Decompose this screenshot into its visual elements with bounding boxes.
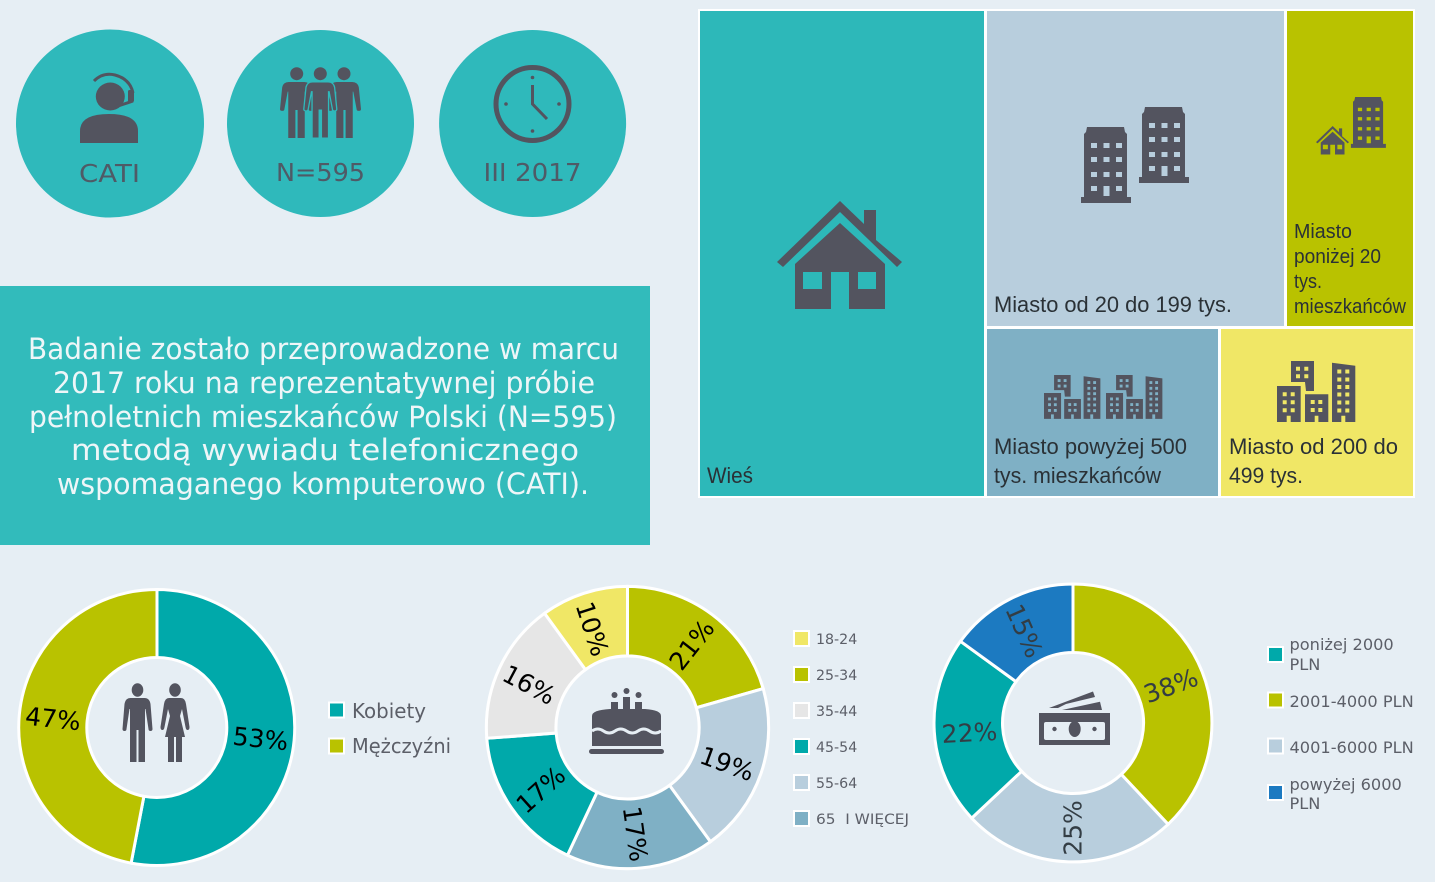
label: N=595: N=595	[276, 158, 365, 187]
icon: man and woman	[122, 683, 190, 762]
value: 22%: 22%	[941, 717, 998, 749]
legend: income: poniżej 2000	[1290, 635, 1394, 654]
label: Miasto od 200 do 499 tys.: 499 tys.	[1229, 463, 1303, 488]
label: Miasto od 20 do 199 tys.: Miasto od 20 do 199 tys.	[994, 292, 1232, 317]
legend: income: 4001-6000 PLN	[1290, 738, 1414, 757]
treemap: place of residence	[698, 9, 1415, 498]
value: 17%: 17%	[617, 804, 653, 864]
label: Miasto od 200 do 499 tys.	[1229, 434, 1398, 488]
label: Wieś: Wieś	[707, 463, 753, 488]
label: Miasto powyżej 500 tys. mieszkańców	[994, 434, 1187, 488]
legend: income: PLN	[1290, 655, 1320, 674]
icon: clock	[496, 68, 569, 140]
value: 15%: 15%	[999, 600, 1049, 662]
text panel: study description: wspomaganego komputerowo (CATI).	[57, 467, 589, 501]
value: 21%: 21%	[663, 614, 721, 676]
value: 19%: 19%	[696, 741, 758, 787]
treemap cell: city 20 to 199 thousand	[987, 11, 1284, 326]
label: III 2017: III 2017	[484, 158, 582, 187]
treemap cell: city 200 to 499 thousand	[1221, 329, 1413, 496]
badge: sample size	[227, 30, 414, 217]
text panel: study description	[0, 286, 650, 545]
legend: income: PLN	[1290, 794, 1320, 813]
icon: city buildings	[1277, 361, 1355, 422]
legend: income: 2001-4000 PLN	[1290, 692, 1414, 711]
badge: CATI method	[16, 30, 204, 218]
badge: date of study	[439, 30, 626, 217]
label: Miasto od 200 do 499 tys.: Miasto od 200 do	[1229, 434, 1398, 459]
label: CATI: CATI	[79, 159, 140, 188]
value: 17%: 17%	[511, 761, 571, 819]
icon: call centre agent with headset	[80, 74, 138, 143]
legend: age: 45-54	[816, 740, 857, 756]
label: Miasto poniżej 20 tys. mieszkańców: Miasto	[1294, 221, 1352, 243]
label: Miasto powyżej 500 tys. mieszkańców: tys. mieszkańców	[994, 463, 1161, 488]
label: Miasto poniżej 20 tys. mieszkańców: mieszkańców	[1294, 296, 1407, 318]
legend: gender	[329, 699, 451, 758]
value: 10%: 10%	[570, 598, 614, 660]
treemap cell: city above 500 thousand	[987, 329, 1218, 496]
value: 25%: 25%	[1058, 800, 1088, 856]
donut chart: gender	[19, 589, 295, 865]
legend: age: 65 I WIĘCEJ	[816, 812, 909, 828]
value: 38%: 38%	[1140, 663, 1202, 709]
value: 16%: 16%	[498, 659, 560, 711]
icon: small house and tower	[1316, 97, 1386, 155]
icon: two tower blocks	[1081, 107, 1189, 203]
text panel: study description: pełnoletnich mieszkańców Polski (N=595)	[29, 400, 617, 434]
legend: age: 35-44	[816, 704, 857, 720]
legend: age: 18-24	[816, 632, 857, 648]
donut chart: age	[486, 586, 769, 869]
value: 53%: 53%	[231, 722, 290, 756]
value: 47%: 47%	[24, 702, 82, 736]
icon: birthday cake	[589, 688, 664, 754]
text panel: study description: Badanie zostało przeprowadzone w marcu	[28, 332, 619, 366]
label: Miasto poniżej 20 tys. mieszkańców	[1294, 221, 1407, 318]
treemap cell: Wieś	[700, 11, 984, 496]
legend: age: 25-34	[816, 668, 857, 684]
legend: age	[794, 631, 909, 828]
donut chart: income	[934, 584, 1212, 862]
label: Miasto poniżej 20 tys. mieszkańców: poniżej 20	[1294, 246, 1381, 268]
legend: gender: Kobiety	[352, 699, 426, 723]
text panel: study description: 2017 roku na reprezentatywnej próbie	[53, 366, 595, 400]
text panel: study description: metodą wywiadu telefonicznego	[71, 433, 579, 467]
icon: banknotes	[1039, 692, 1110, 745]
treemap cell: city below 20 thousand	[1287, 11, 1413, 326]
icon: three people	[280, 67, 361, 138]
icon: city skyline	[1044, 375, 1162, 419]
legend: age: 55-64	[816, 776, 857, 792]
icon: large house	[777, 201, 902, 309]
legend: gender: Mężczyźni	[352, 734, 451, 758]
label: Miasto powyżej 500 tys. mieszkańców: Miasto powyżej 500	[994, 434, 1187, 459]
label: Miasto poniżej 20 tys. mieszkańców: tys.	[1294, 271, 1322, 293]
legend: income: powyżej 6000	[1290, 775, 1402, 794]
legend: income	[1268, 635, 1414, 813]
